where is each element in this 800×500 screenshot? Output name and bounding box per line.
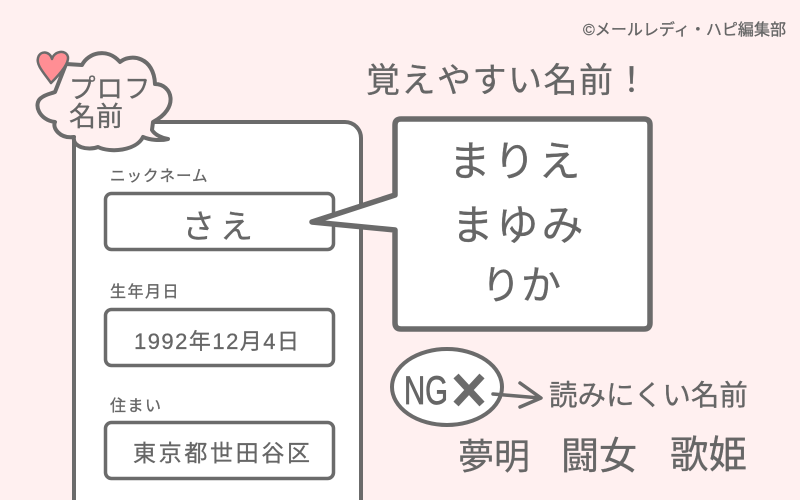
- badge: NG: [392, 349, 502, 425]
- field: birth date: [106, 310, 334, 366]
- credit: ©メールレディ・ハピ編集部: [583, 20, 786, 39]
- example name: 闘女: 闘女: [561, 436, 637, 478]
- field: address: [106, 422, 334, 478]
- callout: easy names: りか: [481, 264, 561, 308]
- label: birth date: 生年月日: [110, 283, 180, 301]
- icon: heart: [38, 52, 68, 83]
- example name: 夢明: 夢明: [458, 436, 530, 477]
- speech bubble: profile name: 名前: [69, 102, 123, 132]
- field: nickname: さえ: [182, 208, 258, 245]
- badge: NG: NG: [404, 369, 448, 413]
- arrow: [493, 383, 541, 407]
- text: hard-to-read names: 読みにくい名前: [549, 380, 748, 412]
- field: address: 東京都世田谷区: [133, 440, 310, 466]
- speech bubble: profile name: [37, 53, 171, 150]
- field: nickname: [106, 194, 334, 250]
- label: nickname: ニックネーム: [110, 167, 209, 185]
- callout: easy names: [312, 119, 650, 329]
- heading: 覚えやすい名前！: [366, 62, 650, 100]
- callout: easy names: まりえ: [448, 138, 584, 185]
- example name: 歌姫: 歌姫: [670, 434, 747, 477]
- label: address: 住まい: [110, 397, 163, 415]
- panel: profile card: [74, 122, 361, 500]
- callout: easy names: まゆみ: [451, 202, 587, 249]
- speech bubble: profile name: プロフ: [69, 74, 152, 104]
- field: birth date: 1992年12月4日: [134, 329, 299, 354]
